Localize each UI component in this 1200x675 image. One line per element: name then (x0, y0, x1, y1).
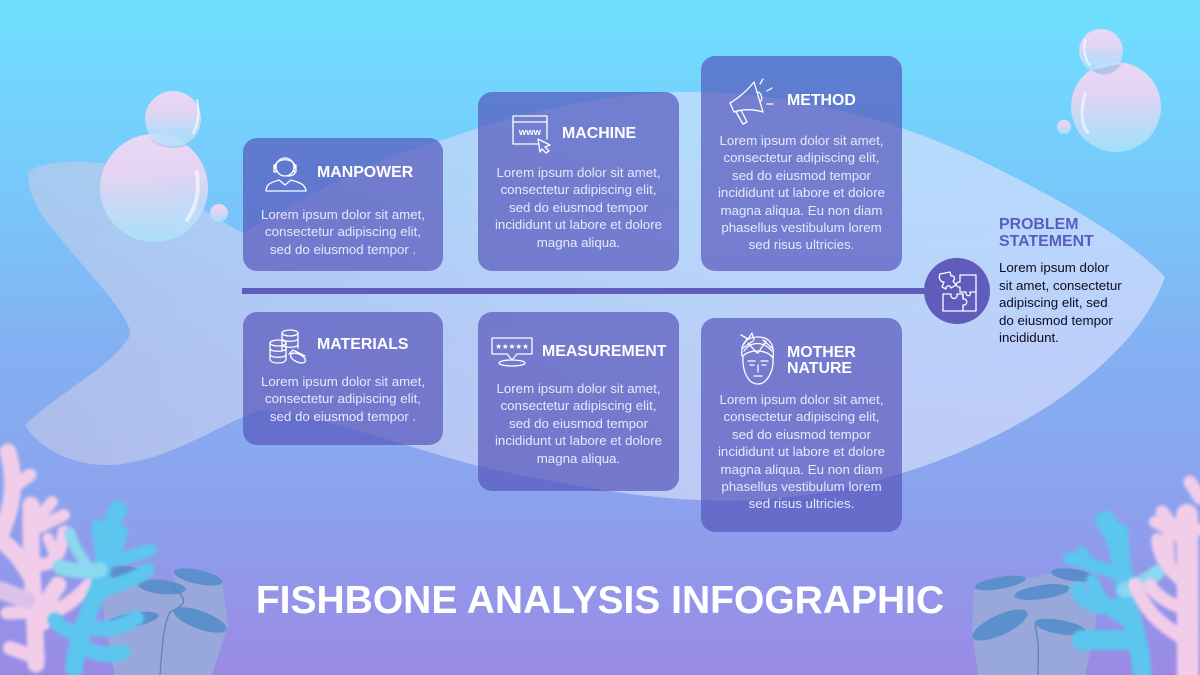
problem statement heading (999, 216, 1094, 250)
text (718, 133, 885, 252)
icon: www browser cursor: www (518, 127, 542, 138)
problem statement text: adipiscing elit, sed (999, 295, 1108, 310)
icon: megaphone (729, 78, 774, 125)
heading: MANPOWER (317, 164, 413, 181)
text: phasellus vestibulum lorem (721, 220, 882, 235)
text: magna aliqua. Eu non diam (721, 203, 882, 218)
text: Lorem ipsum dolor sit amet, (261, 207, 425, 222)
text (261, 207, 425, 257)
text (495, 165, 662, 250)
heading: MOTHER (787, 344, 856, 361)
heading: MATERIALS (317, 336, 409, 353)
text: consectetur adipiscing elit, (724, 150, 879, 165)
fishbone spine (242, 288, 932, 294)
icon: star rating bubble: ★★★★★ (495, 342, 529, 351)
text: consectetur adipiscing elit, (265, 391, 421, 406)
text: Lorem ipsum dolor sit amet, (719, 392, 884, 407)
icon: puzzle in spine head circle (924, 258, 990, 324)
text: sed do eiusmod tempor . (270, 409, 416, 424)
text: consectetur adipiscing elit, (724, 409, 879, 424)
panel: mother nature (701, 318, 902, 532)
text (495, 381, 662, 466)
problem statement heading: STATEMENT (999, 233, 1094, 250)
coral: right pink (1135, 482, 1200, 675)
heading: MEASUREMENT (542, 343, 666, 360)
text: sed do eiusmod tempor . (270, 242, 416, 257)
coral: right sponge tubes (969, 566, 1100, 675)
panel: manpower (243, 138, 443, 271)
panel: materials (243, 312, 443, 445)
icon: stacked coins (269, 329, 306, 364)
icon: star rating bubble (491, 337, 533, 367)
icon: www browser cursor (512, 115, 551, 154)
coral: left sponge tubes (98, 565, 229, 675)
text: incididunt ut labore et dolore (718, 444, 885, 459)
icon: headset operator (265, 157, 307, 192)
panel: measurement (478, 312, 679, 491)
heading: NATURE (787, 360, 852, 377)
text: sed risus ultricies. (749, 496, 854, 511)
text: consectetur adipiscing elit, (265, 224, 421, 239)
problem statement heading: PROBLEM (999, 216, 1078, 233)
title: FISHBONE ANALYSIS INFOGRAPHIC (256, 579, 944, 622)
fish silhouette (25, 92, 1165, 501)
heading (787, 344, 856, 377)
text: Lorem ipsum dolor sit amet, (496, 381, 661, 396)
text: consectetur adipiscing elit, (501, 398, 656, 413)
text: sed do eiusmod tempor (732, 427, 871, 442)
text: sed do eiusmod tempor (732, 168, 871, 183)
problem statement text: sit amet, consectetur (999, 278, 1122, 292)
text (718, 392, 885, 511)
text: sed do eiusmod tempor (509, 200, 648, 215)
text: magna aliqua. Eu non diam (721, 462, 882, 477)
problem statement text: Lorem ipsum dolor (999, 260, 1109, 275)
heading: MACHINE (562, 125, 636, 142)
text: Lorem ipsum dolor sit amet, (719, 133, 884, 148)
text: magna aliqua. (537, 235, 620, 250)
text: consectetur adipiscing elit, (501, 182, 656, 197)
text: Lorem ipsum dolor sit amet, (261, 374, 425, 389)
problem statement text: do eiusmod tempor (999, 312, 1113, 328)
problem statement text (999, 260, 1122, 345)
text: sed do eiusmod tempor (509, 416, 648, 431)
problem statement text: incididunt. (999, 330, 1059, 345)
coral: left blue (55, 510, 150, 668)
text (261, 374, 425, 424)
icon: woman with head wrap (740, 332, 774, 385)
coral: right blue (1070, 520, 1158, 672)
bubbles: right cluster (1057, 29, 1161, 152)
text: phasellus vestibulum lorem (721, 479, 882, 494)
text: sed risus ultricies. (749, 237, 854, 252)
panel: machine (478, 92, 679, 271)
text: incididunt ut labore et dolore (495, 433, 662, 448)
panel: method (701, 56, 902, 271)
bubbles: left cluster (100, 91, 228, 242)
text: Lorem ipsum dolor sit amet, (496, 165, 661, 180)
text: magna aliqua. (537, 451, 620, 466)
text: incididunt ut labore et dolore (718, 185, 885, 200)
coral: left pink (0, 452, 97, 664)
heading: METHOD (787, 92, 856, 109)
text: incididunt ut labore et dolore (495, 217, 662, 232)
